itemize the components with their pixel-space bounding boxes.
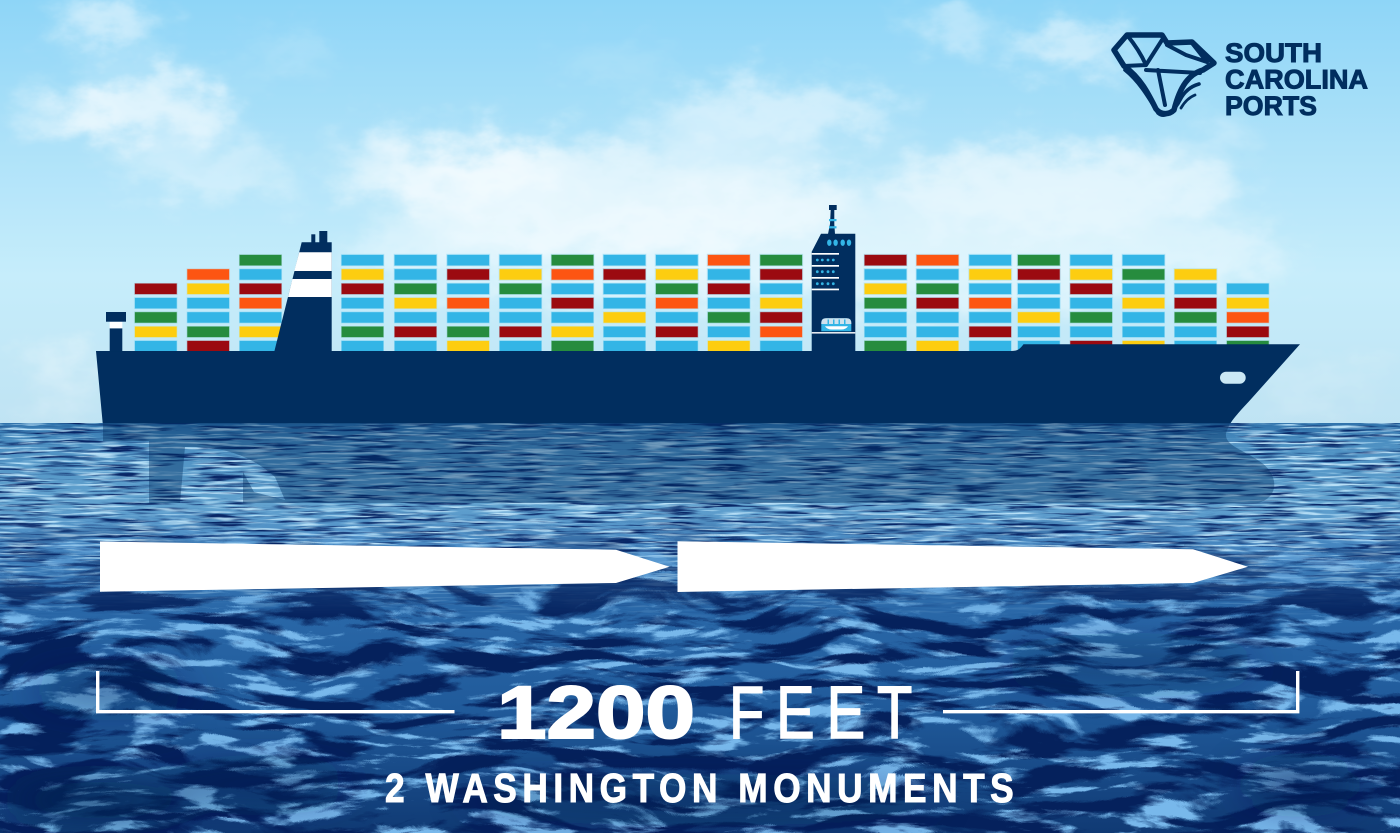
arrow 1 (first monument) — [100, 542, 670, 592]
porthole — [1220, 372, 1246, 384]
stack 8 — [551, 254, 594, 352]
logo icon: state outline — [1114, 35, 1214, 115]
stack 16 — [1017, 254, 1060, 352]
underwater hull silhouette — [103, 423, 1274, 503]
stack 13 — [864, 254, 907, 352]
stack 1 — [134, 283, 177, 352]
stack 6 — [447, 254, 490, 352]
stack 12 — [760, 254, 803, 352]
logo wordmark: SOUTH — [1225, 38, 1322, 68]
stack 3 — [239, 254, 282, 352]
stack 10 — [655, 254, 698, 352]
logo wordmark: CAROLINA — [1225, 64, 1368, 94]
logo: South Carolina Ports — [1114, 35, 1368, 121]
stack 18 — [1122, 254, 1165, 352]
stack 7 — [499, 254, 542, 352]
stern post — [106, 312, 126, 351]
hull — [96, 344, 1300, 423]
ship — [96, 205, 1300, 423]
logo wordmark — [1225, 38, 1368, 121]
measurement heading — [497, 671, 912, 755]
stack 2 — [187, 269, 230, 352]
measurement heading: FEET — [729, 672, 912, 755]
background: ocean — [0, 423, 1400, 833]
bridge tower — [812, 205, 855, 352]
deck lines — [812, 253, 855, 334]
measurement heading: 1200 — [497, 671, 695, 754]
bridge windows — [816, 240, 851, 285]
stack 17 — [1070, 254, 1113, 352]
stack 5 — [394, 254, 437, 352]
antenna — [828, 205, 837, 234]
logo wordmark: PORTS — [1225, 91, 1317, 121]
funnel — [274, 231, 332, 352]
stack 4 — [341, 254, 384, 352]
stack 20 — [1226, 283, 1269, 352]
right dimension bracket — [943, 671, 1298, 712]
subtitle: 2 WASHINGTON MONUMENTS — [385, 766, 1014, 812]
stack 15 — [969, 254, 1012, 352]
container stacks — [134, 254, 1269, 352]
left dimension bracket — [98, 671, 454, 712]
arrow 2 (second monument) — [678, 541, 1248, 592]
stack 11 — [707, 254, 750, 352]
background: sky — [0, 0, 1400, 424]
stack 19 — [1174, 269, 1217, 352]
lifeboat — [821, 318, 851, 331]
stack 14 — [916, 254, 959, 352]
stack 9 — [603, 254, 646, 352]
